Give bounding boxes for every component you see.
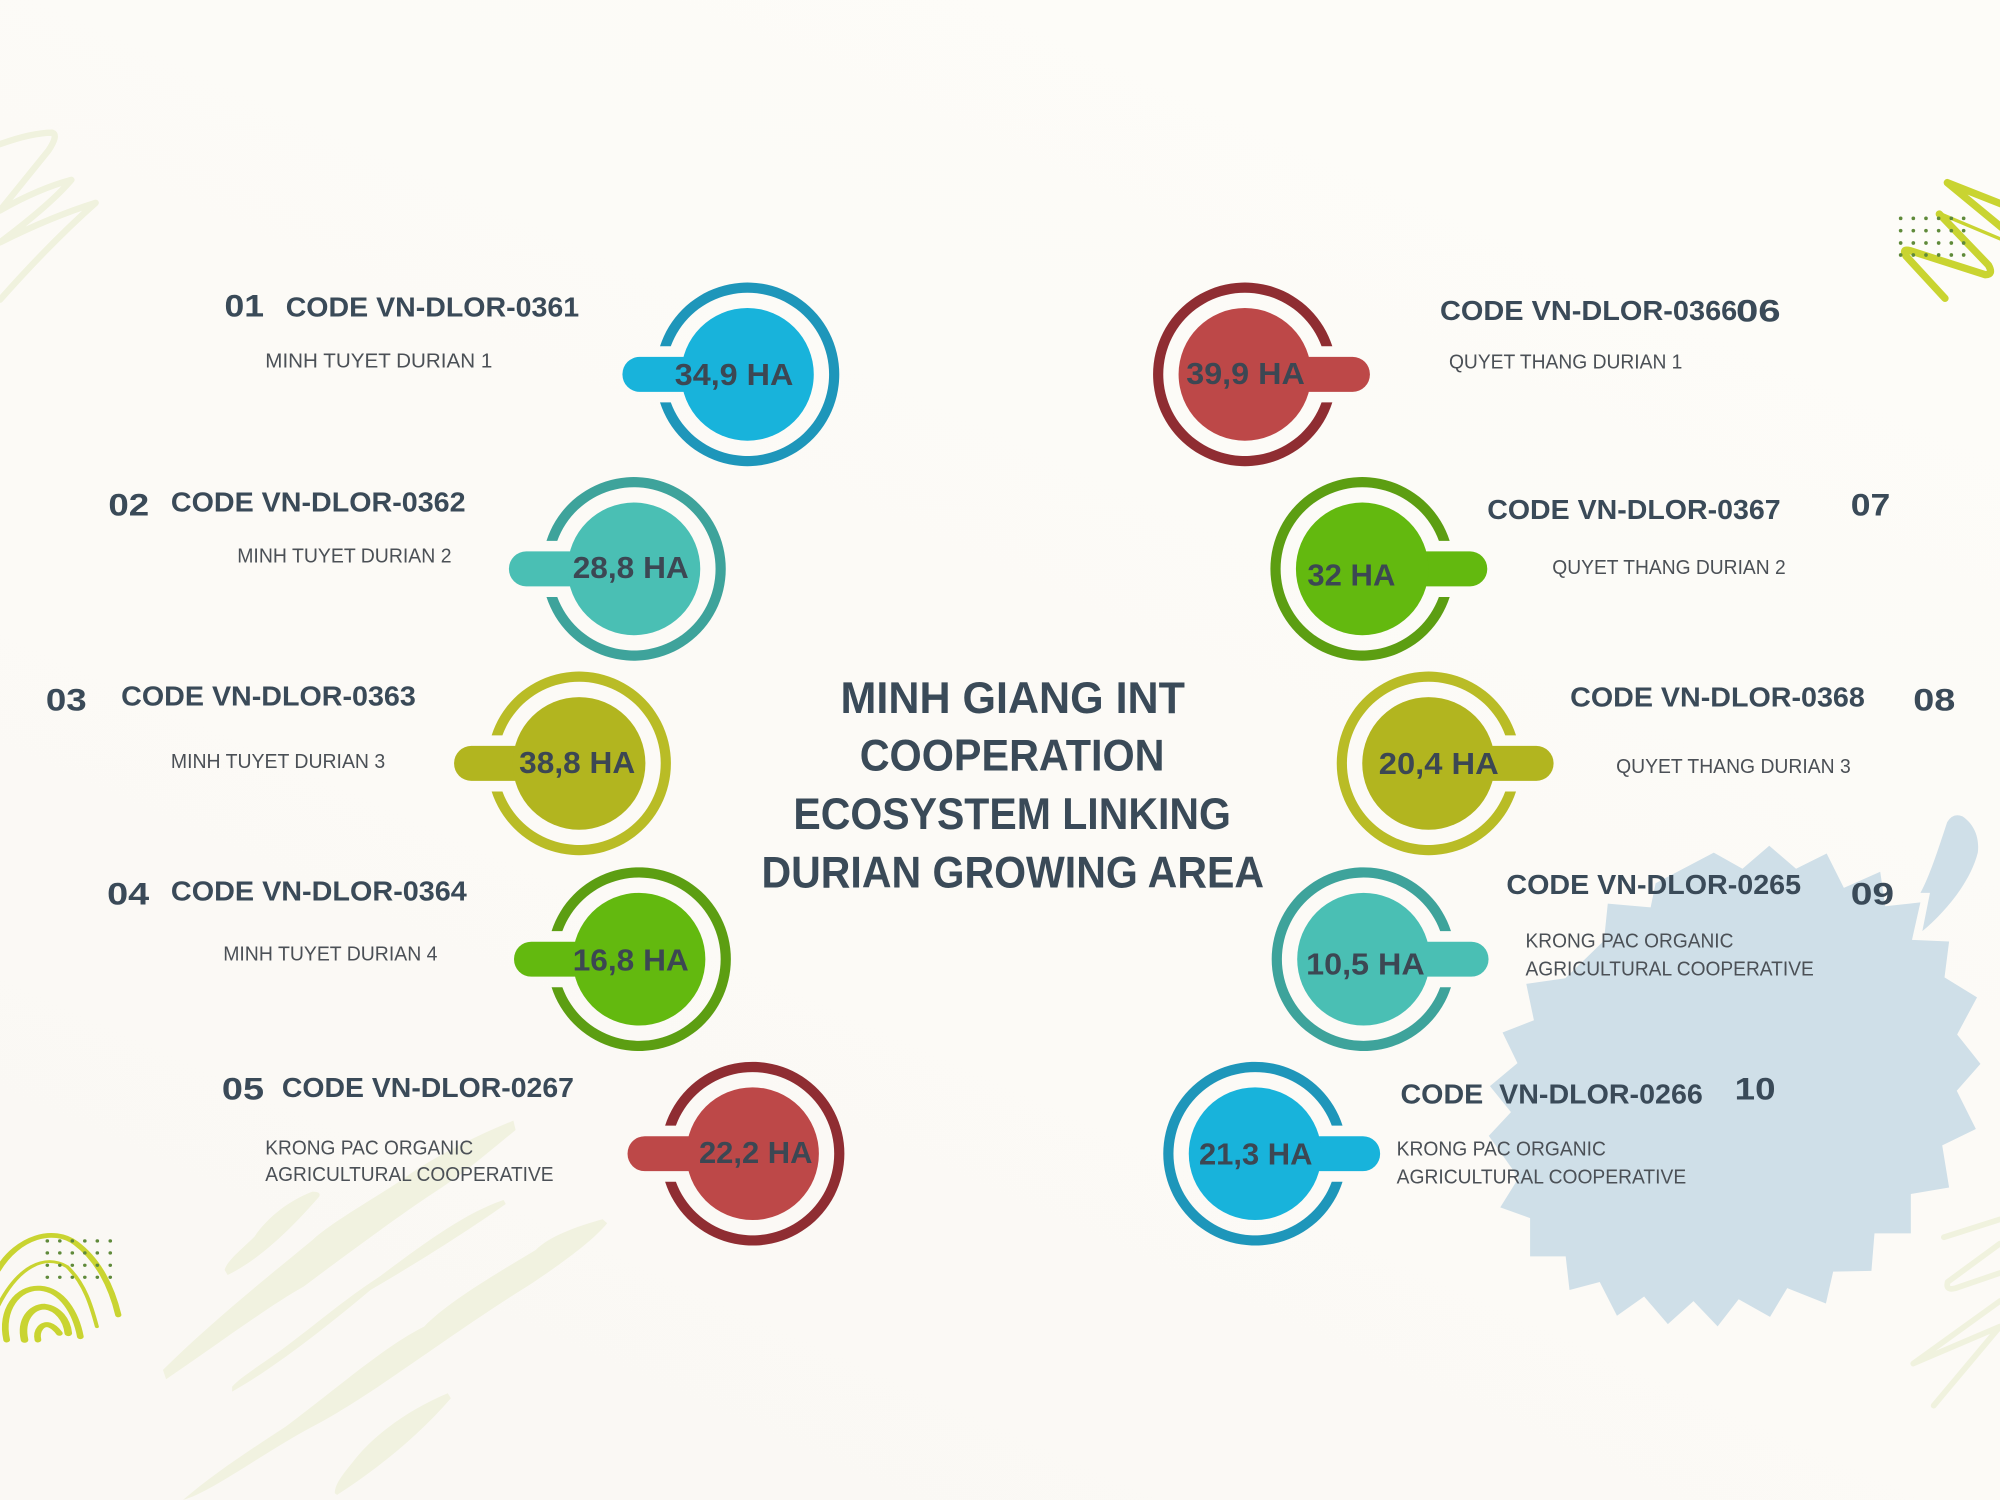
item 01: value: 34,9 HA <box>675 358 793 392</box>
item 04: code: CODE VN-DLOR-0364 <box>171 876 468 907</box>
item 06: circle <box>1153 283 1370 466</box>
item 06: code: CODE VN-DLOR-0366 <box>1440 295 1737 326</box>
decoration: bottom-right scribble <box>1913 1219 2000 1406</box>
item 06: value: 39,9 HA <box>1186 357 1305 391</box>
item 10: circle <box>1163 1062 1380 1246</box>
item 10: name: KRONG PAC ORGANIC <box>1397 1139 1606 1161</box>
item 03: circle <box>454 672 671 855</box>
item 08: circle <box>1337 672 1554 855</box>
title: COOPERATION <box>860 731 1165 780</box>
item 02: code: CODE VN-DLOR-0362 <box>171 486 466 517</box>
item 09: code: CODE VN-DLOR-0265 <box>1506 869 1801 900</box>
item 05: value: 22,2 HA <box>699 1136 812 1170</box>
item 06: number: 06 <box>1736 293 1781 328</box>
item 02: circle <box>509 477 726 661</box>
decoration: pale blue starburst blob with droplet <box>1489 815 1980 1326</box>
item 10: number: 10 <box>1735 1071 1776 1106</box>
item 08: number: 08 <box>1913 682 1955 717</box>
title: MINH GIANG INT <box>841 674 1185 723</box>
item 07: code: CODE VN-DLOR-0367 <box>1487 494 1781 525</box>
item 08: value: 20,4 HA <box>1379 747 1499 781</box>
title: DURIAN GROWING AREA <box>761 849 1264 898</box>
item 05: name: AGRICULTURAL COOPERATIVE <box>265 1164 554 1186</box>
item 10: name <box>1397 1139 1686 1189</box>
title: ECOSYSTEM LINKING <box>793 790 1231 839</box>
item 04: value: 16,8 HA <box>573 944 689 978</box>
item 02: number: 02 <box>108 487 149 522</box>
item 07: circle <box>1270 477 1487 661</box>
item 01: code: CODE VN-DLOR-0361 <box>286 291 579 322</box>
item 05: code: CODE VN-DLOR-0267 <box>282 1072 574 1103</box>
item 06: name: QUYET THANG DURIAN 1 <box>1449 352 1682 374</box>
item 01: name: MINH TUYET DURIAN 1 <box>265 350 492 372</box>
decoration: top-right scribble <box>1899 183 2000 298</box>
item 05: circle <box>628 1062 844 1246</box>
item 09: number: 09 <box>1851 876 1894 911</box>
item 04: circle <box>514 867 731 1051</box>
item 10: value: 21,3 HA <box>1199 1138 1312 1172</box>
decoration: bottom-left fingerprint with dots <box>0 1235 118 1340</box>
item 02: name: MINH TUYET DURIAN 2 <box>237 545 452 567</box>
item 05: number: 05 <box>222 1071 264 1106</box>
item 09: name <box>1526 931 1814 981</box>
item 03: value: 38,8 HA <box>519 746 635 780</box>
item 10: name: AGRICULTURAL COOPERATIVE <box>1397 1167 1686 1189</box>
item 04: name: MINH TUYET DURIAN 4 <box>223 943 437 965</box>
item 07: value: 32 HA <box>1307 558 1395 592</box>
item 01: number: 01 <box>224 288 264 323</box>
item 08: code: CODE VN-DLOR-0368 <box>1570 682 1865 713</box>
item 05: name <box>265 1137 554 1186</box>
item 03: code: CODE VN-DLOR-0363 <box>121 680 416 711</box>
item 09: value: 10,5 HA <box>1306 947 1425 981</box>
item 04: number: 04 <box>107 876 150 911</box>
item 09: name: KRONG PAC ORGANIC <box>1526 931 1733 953</box>
item 09: name: AGRICULTURAL COOPERATIVE <box>1526 959 1814 981</box>
title <box>761 674 1264 898</box>
item 05: name: KRONG PAC ORGANIC <box>265 1137 473 1159</box>
item 02: value: 28,8 HA <box>573 551 689 585</box>
decoration: top-left scribble <box>0 133 96 300</box>
item 07: name: QUYET THANG DURIAN 2 <box>1552 557 1786 579</box>
item 07: number: 07 <box>1851 487 1890 522</box>
item 03: name: MINH TUYET DURIAN 3 <box>171 751 385 773</box>
item 08: name: QUYET THANG DURIAN 3 <box>1616 756 1851 778</box>
item 10: code: CODE VN-DLOR-0266 <box>1401 1078 1703 1109</box>
item 03: number: 03 <box>46 682 87 717</box>
decoration: bottom-left brush strokes <box>163 1121 607 1500</box>
item 09: circle <box>1272 867 1489 1051</box>
item 01: circle <box>622 283 839 466</box>
